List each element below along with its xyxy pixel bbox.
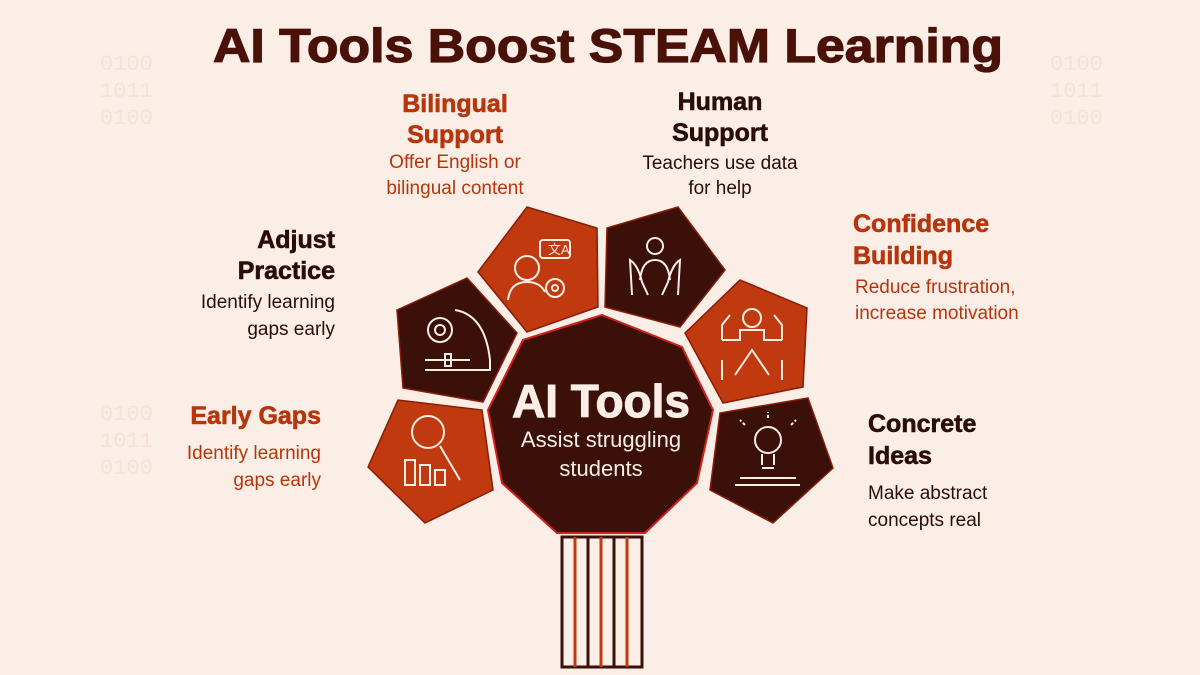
panel: bilingual pentagon — [478, 207, 598, 332]
text: bilingual support — [386, 90, 524, 199]
text: bilingual support: Support — [407, 121, 504, 149]
panel: confidence pentagon — [685, 280, 807, 403]
text: adjust practice — [201, 226, 336, 340]
text: adjust practice: gaps early — [247, 319, 335, 340]
text: confidence building: Confidence — [853, 210, 989, 238]
text: human support: for help — [688, 178, 752, 199]
text: early gaps — [187, 402, 321, 491]
text: bilingual support: Offer English or — [389, 152, 521, 173]
text: bilingual support: Bilingual — [402, 90, 508, 118]
icon: lightbulb — [735, 412, 800, 485]
text: 1011 — [100, 79, 153, 104]
panel: concrete ideas pentagon — [710, 398, 833, 523]
text: 1011 — [1050, 79, 1103, 104]
central subtext: Assist struggling — [521, 427, 681, 452]
text: 0100 — [100, 106, 153, 131]
text: concrete ideas: Concrete — [868, 410, 976, 438]
panel: adjust practice pentagon — [397, 278, 517, 402]
text: 0100 — [1050, 106, 1103, 131]
panel: early gaps pentagon — [368, 400, 493, 523]
text: adjust practice: Identify learning — [201, 292, 335, 313]
text: 0100 — [1050, 52, 1103, 77]
icon: strong figure — [722, 309, 782, 380]
text: concrete ideas: Ideas — [868, 442, 932, 470]
text: early gaps: Early Gaps — [190, 402, 321, 430]
icon: hand gear — [425, 310, 490, 370]
icon: hands with person — [630, 238, 680, 295]
text: early gaps: gaps early — [233, 470, 321, 491]
central heading: AI Tools — [512, 375, 690, 427]
panel: central nonagon: students — [559, 456, 643, 481]
text: bilingual support: bilingual content — [386, 178, 524, 199]
icon: magnifier chart — [405, 416, 460, 485]
panel: human support pentagon — [605, 207, 725, 327]
text: 0100 — [100, 402, 153, 427]
text: human support: Human — [678, 88, 762, 116]
text: human support: Teachers use data — [642, 153, 798, 174]
stem — [562, 537, 642, 667]
text: 0100 — [100, 456, 153, 481]
text: adjust practice: Practice — [238, 257, 335, 285]
text: early gaps: Identify learning — [187, 443, 321, 464]
text: confidence building: Reduce frustration, — [855, 277, 1016, 298]
title: AI Tools Boost STEAM Learning — [213, 19, 1003, 72]
text: human support: Support — [672, 119, 769, 147]
text: concrete ideas: Make abstract — [868, 483, 988, 504]
icon: person with translation bubble: 文A — [548, 242, 570, 257]
text: confidence building — [853, 210, 1019, 324]
panel: central nonagon — [488, 315, 713, 533]
text: adjust practice: Adjust — [257, 226, 336, 254]
text: human support — [642, 88, 798, 199]
text: 0100 — [100, 52, 153, 77]
text: confidence building: Building — [853, 242, 953, 270]
text: confidence building: increase motivation — [855, 303, 1019, 324]
text: 1011 — [100, 429, 153, 454]
text: concrete ideas — [868, 410, 988, 531]
text: concrete ideas: concepts real — [868, 510, 981, 531]
